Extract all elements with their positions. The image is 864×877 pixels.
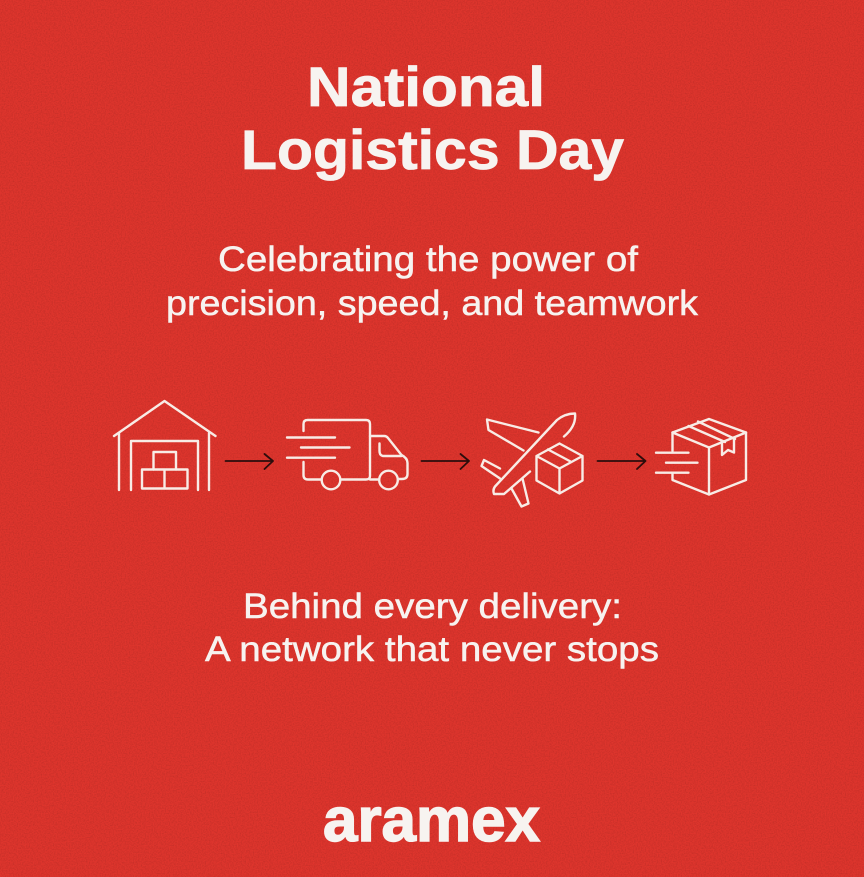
icon: delivery truck [287,420,408,489]
arrow: plane to parcel [598,454,646,469]
tagline: Behind every delivery: [243,587,622,626]
title: National [307,55,545,118]
icon: warehouse [114,401,216,490]
subtitle: precision, speed, and teamwork [166,284,699,323]
logo: aramex: aramex [323,786,541,855]
subtitle: Celebrating the power of [218,240,638,279]
icon: plane with parcel [482,414,582,506]
arrow: truck to plane [422,454,469,469]
arrow: warehouse to truck [226,454,273,469]
icon: fast delivery parcel [656,419,746,494]
subtitle [166,240,699,323]
tagline [205,587,659,669]
title: Logistics Day [241,118,624,181]
tagline: A network that never stops [205,630,659,669]
title [241,55,624,181]
process flow [114,401,746,506]
